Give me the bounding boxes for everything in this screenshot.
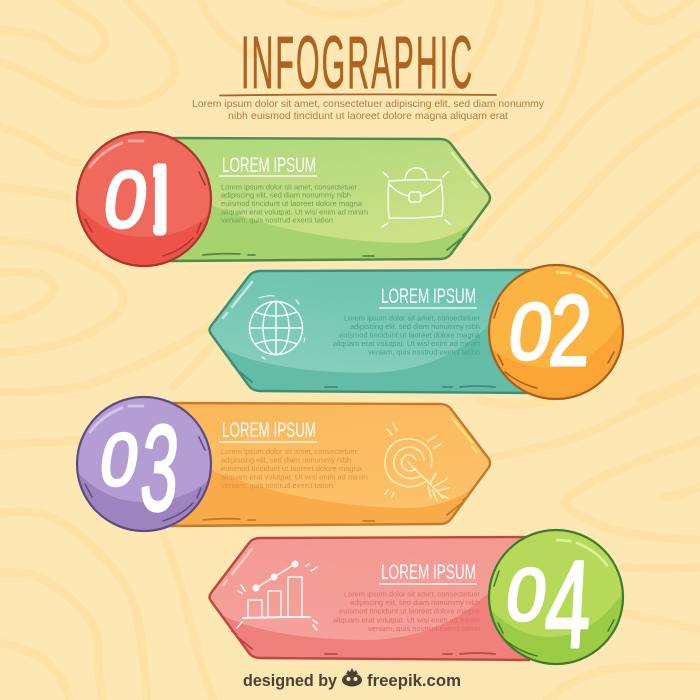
number 03 <box>95 400 183 536</box>
banner shape <box>170 138 490 261</box>
icon: freepik mascot <box>342 668 362 686</box>
number badge 01 <box>70 132 215 270</box>
body text: Lorem ipsum dolor sit amet, consectetuer <box>221 447 357 456</box>
heading: LOREM IPSUM <box>381 561 476 584</box>
body text: adipiscing elit, sed diam nonummy nibh <box>221 191 351 200</box>
number 03: 3 <box>137 400 183 536</box>
heading: LOREM IPSUM <box>222 419 316 442</box>
credit line <box>243 668 461 690</box>
body text: adipiscing elit, sed diam nonummy nibh <box>350 322 480 331</box>
panel: step 03 orange <box>70 397 490 536</box>
panel: step 02 teal <box>210 265 628 405</box>
body text: aliquam erat volutpat. Ut wisi enim ad minim <box>221 207 368 216</box>
body text: aliquam erat volutpat. Ut wisi enim ad minim <box>221 472 368 482</box>
panel: step 04 red <box>210 530 628 674</box>
heading: LOREM IPSUM <box>381 285 476 308</box>
number 01: 0 <box>98 155 153 244</box>
heading: LOREM IPSUM <box>222 154 316 177</box>
body text <box>333 314 481 356</box>
body text: Lorem ipsum dolor sit amet, consectetuer <box>344 314 480 322</box>
body text: euismod tincidunt ut laoreet dolore magna <box>339 607 481 616</box>
number 02 <box>503 274 595 387</box>
body text: Lorem ipsum dolor sit amet, consectetuer <box>221 182 357 191</box>
number 04: 4 <box>542 536 595 674</box>
body text: adipiscing elit, sed diam nonummy nibh <box>221 456 351 464</box>
number badge 04 <box>485 530 628 674</box>
banner shape <box>210 270 530 393</box>
number 04: 0 <box>501 554 552 636</box>
body text: veniam, quis nostrud exerci tation <box>221 481 333 490</box>
title: INFOGRAPHIC <box>241 21 474 104</box>
number 02: 0 <box>503 287 558 376</box>
body text: veniam, quis nostrud exerci tation <box>368 348 480 356</box>
number badge 03 <box>70 397 215 536</box>
icon: target with arrow <box>385 423 449 501</box>
panel: step 01 green <box>70 132 490 270</box>
banner shape <box>210 537 530 660</box>
body text <box>221 182 368 225</box>
banner shape <box>170 403 490 526</box>
body text <box>333 590 481 633</box>
body text <box>221 447 368 490</box>
body text: veniam, quis nostrud exerci tation <box>368 624 480 633</box>
icon: briefcase <box>382 168 450 227</box>
number 01 <box>106 164 166 236</box>
number 01: 1 <box>131 144 187 256</box>
body text: euismod tincidunt ut laoreet dolore magna <box>221 199 363 208</box>
body text: Lorem ipsum dolor sit amet, consectetuer <box>344 590 480 598</box>
credit line: freepik.com <box>367 671 461 690</box>
body text: euismod tincidunt ut laoreet dolore magna <box>221 464 363 473</box>
number badge 02 <box>485 265 628 405</box>
icon: bar chart <box>237 561 317 630</box>
body text: veniam, quis nostrud exerci tation <box>221 216 333 225</box>
subtitle <box>192 98 545 122</box>
subtitle: Lorem ipsum dolor sit amet, consectetuer adipiscing elit, sed diam nonummy <box>192 98 545 110</box>
subtitle: nibh euismod tincidunt ut laoreet dolore magna aliquam erat <box>228 110 508 122</box>
body text: adipiscing elit, sed diam nonummy nibh <box>350 598 480 607</box>
body text: aliquam erat volutpat. Ut wisi enim ad minim <box>333 615 480 624</box>
number 02: 2 <box>546 274 595 387</box>
number 04 <box>501 536 595 674</box>
credit line: designed by <box>243 671 338 690</box>
number 03: 0 <box>95 418 144 501</box>
body text: aliquam erat volutpat. Ut wisi enim ad minim <box>333 339 480 348</box>
body text: euismod tincidunt ut laoreet dolore magna <box>339 330 481 340</box>
icon: globe <box>250 296 305 359</box>
